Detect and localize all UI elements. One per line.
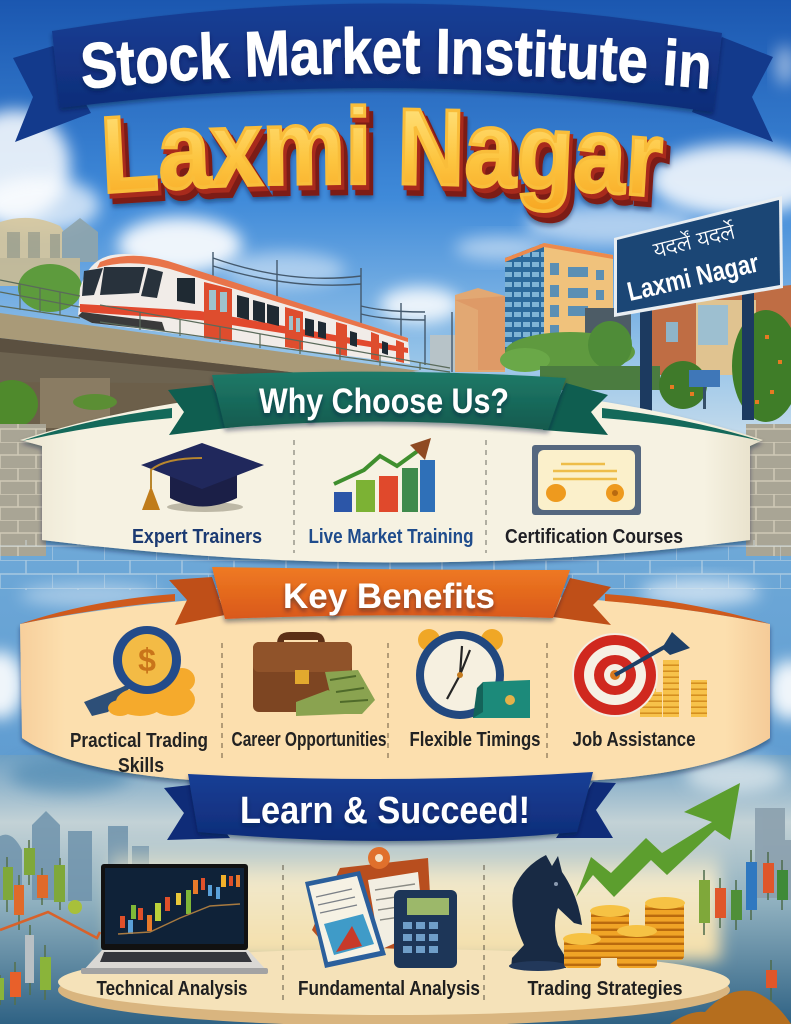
elevated bridge bbox=[0, 313, 420, 440]
ribbon: learn and succeed bbox=[164, 772, 616, 841]
icon: briefcase with money bbox=[253, 632, 375, 716]
label: practical trading skills: Practical Trading bbox=[70, 730, 208, 752]
heading Laxmi Nagar: Laxmi Nagar bbox=[109, 111, 674, 230]
green edge stripe right bbox=[602, 408, 761, 441]
left city skyline bbox=[0, 811, 149, 901]
dividers bbox=[283, 865, 484, 1003]
lower background band bbox=[0, 755, 791, 1024]
side clouds middle bbox=[0, 578, 791, 720]
banner body bbox=[52, 3, 722, 112]
label: practical trading skills bbox=[70, 730, 208, 777]
label: flexible timings: Flexible Timings bbox=[410, 729, 540, 751]
icon: rising green arrow bbox=[576, 783, 740, 897]
dividers bbox=[294, 440, 486, 553]
panel: key benefits bbox=[20, 567, 770, 782]
sign place name: Laxmi Nagar bbox=[624, 247, 762, 307]
heading: Learn & Succeed! bbox=[240, 790, 530, 832]
label: expert trainers: Expert Trainers bbox=[132, 526, 262, 548]
trees and hedge right bbox=[500, 310, 791, 422]
icon: gold coin stacks bbox=[563, 897, 685, 968]
right candlesticks bbox=[699, 850, 788, 1000]
heading Laxmi Nagar: Laxmi Nagar bbox=[104, 103, 664, 213]
stage platform bbox=[58, 949, 730, 1024]
label: live market training: Live Market Training bbox=[308, 526, 474, 548]
banner tails bbox=[13, 46, 91, 142]
label: trading strategies: Trading Strategies bbox=[528, 978, 682, 1000]
metro train bbox=[78, 254, 410, 364]
label: certification courses: Certification Courses bbox=[505, 526, 683, 548]
orange edge stripe left bbox=[20, 594, 175, 624]
left domed building bbox=[0, 218, 98, 286]
right city skyline bbox=[755, 808, 791, 900]
label: fundamental analysis: Fundamental Analysis bbox=[298, 978, 480, 1000]
icon: alarm clock and book bbox=[416, 629, 530, 719]
sign native script: यदर्लें यदर्ले bbox=[649, 215, 740, 269]
label: job assistance: Job Assistance bbox=[572, 729, 696, 751]
green edge stripe left bbox=[22, 408, 172, 441]
left candlesticks bbox=[0, 840, 100, 1005]
dividers bbox=[222, 643, 547, 760]
orange edge stripe right bbox=[605, 594, 770, 624]
panel: why choose us bbox=[20, 372, 763, 562]
lower left foliage bbox=[0, 380, 117, 428]
label: career opportunities: Career Opportunities bbox=[232, 729, 386, 751]
icon: spice pile corner bbox=[670, 991, 791, 1024]
heading: Why Choose Us? bbox=[259, 382, 509, 421]
panel: learn and succeed bbox=[58, 772, 791, 1024]
brick walls bbox=[0, 424, 791, 590]
label: technical analysis: Technical Analysis bbox=[96, 978, 248, 1000]
middle sky background bbox=[0, 530, 791, 790]
heading: Key Benefits bbox=[283, 577, 495, 616]
railings bbox=[0, 280, 450, 372]
icon: growth chart bbox=[334, 438, 435, 512]
heading line one: Stock Market Institute in bbox=[82, 26, 710, 93]
cream stage backdrop bbox=[110, 845, 720, 960]
icon: magnifier with dollar: $ bbox=[138, 642, 156, 678]
icon: target with arrow and coins bbox=[572, 632, 707, 717]
icon: laptop with chart bbox=[81, 864, 268, 974]
ribbon: why choose us bbox=[168, 372, 608, 435]
icon: clipboard documents calculator bbox=[305, 847, 457, 968]
road sign bbox=[614, 196, 783, 420]
icon: magnifier with dollar bbox=[84, 626, 195, 716]
background sky bbox=[0, 0, 791, 440]
tree behind bridge bbox=[18, 264, 82, 312]
icon: certificate bbox=[532, 445, 641, 515]
trend line bbox=[0, 912, 100, 938]
clouds bbox=[0, 45, 791, 323]
right buildings bbox=[430, 243, 791, 375]
main title banner bbox=[13, 4, 773, 142]
icon: chess knight bbox=[509, 855, 582, 971]
label: practical trading skills: Skills bbox=[118, 755, 164, 777]
ribbon: key benefits bbox=[169, 567, 611, 625]
icon: graduation cap bbox=[141, 443, 264, 512]
overhead wires bbox=[213, 252, 452, 372]
heading Laxmi Nagar: Laxmi Nagar bbox=[109, 106, 667, 218]
